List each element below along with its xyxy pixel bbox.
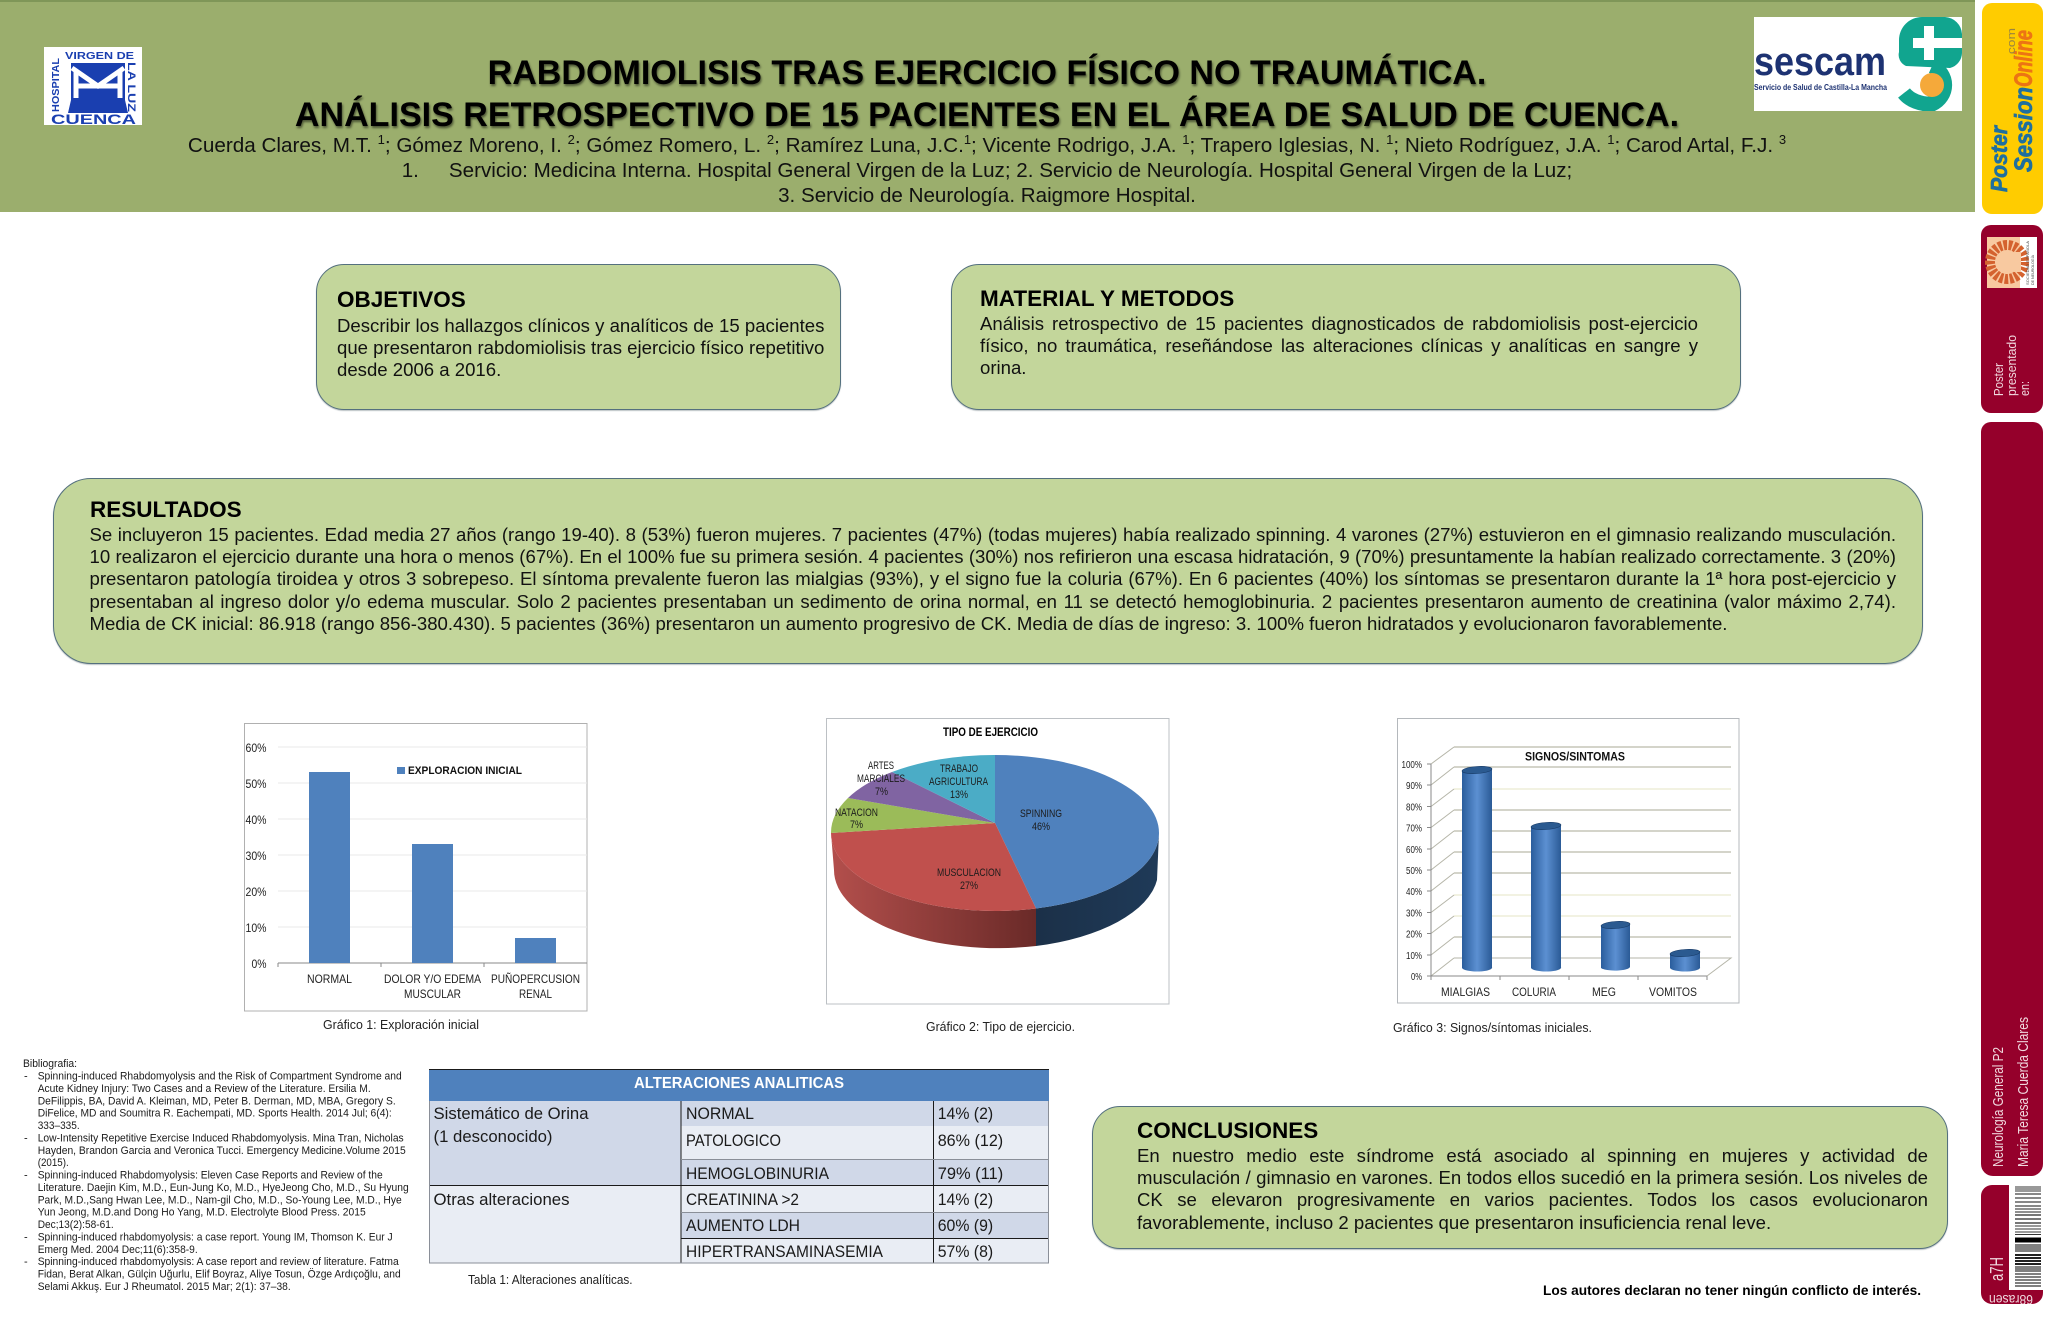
text: resultados: Media de CK inicial: 86.918 (rango 856-380.430). 5 pacientes (36%) presentaron un aumento progresivo de CK. Media de días de ingreso: 3. 100% fueron hidratados y evolucionaron favorablemente. — [90, 613, 1727, 634]
table text: NORMAL — [686, 1105, 754, 1123]
bars — [309, 772, 556, 963]
axis labels: 40% — [1406, 887, 1422, 898]
table text: 79% (11) — [938, 1165, 1003, 1183]
text block: bibliografia: Spinning-induced rhabdomyolysis: a case report. Young IM, Thomson K. Eur J — [38, 1231, 393, 1243]
axis labels: 100% — [1402, 760, 1422, 771]
axis labels: 0% — [1411, 972, 1422, 983]
table: alteraciones analiticas — [429, 1069, 1049, 1264]
heading: material y metodos: MATERIAL Y METODOS — [980, 286, 1234, 310]
header band — [0, 0, 1975, 212]
affiliations line 2: 3. Servicio de Neurología. Raigmore Hospital. — [778, 184, 1196, 207]
axis labels: VOMITOS — [1649, 985, 1697, 999]
axis labels: MIALGIAS — [1441, 985, 1490, 999]
text: material y metodos: orina. — [980, 357, 1026, 378]
pie labels: ARTES — [868, 760, 894, 772]
authors: Cuerda Clares, M.T. 1; Gómez Moreno, I. 2; Gómez Romero, L. 2; Ramírez Luna, J.C.1; Vicente Rodrigo, J.A. 1; Trapero Iglesias, N. 1; Nieto Rodríguez, J.A. 1; Carod Artal, F.J. 3 — [188, 132, 1786, 157]
axis labels: 70% — [1406, 824, 1422, 834]
affiliations line 1: 1. Servicio: Medicina Interna. Hospital General Virgen de la Luz; 2. Servicio de Neurología. Hospital General Virgen de la Luz; — [402, 159, 1572, 182]
bar chart: exploracion inicial — [244, 723, 588, 1012]
sidebar: barcode panel — [1981, 1185, 2043, 1304]
text: resultados: 10 realizaron el ejercicio durante una hora o menos (67%). En el 100% fue su primera sesión. 4 pacientes (30%) nos refirieron una escasa hidratación, 9 (70%) presuntamente la habían realizado correctamente. 3 (20%) — [90, 546, 1896, 567]
title — [188, 54, 1786, 207]
axis labels: RENAL — [519, 987, 552, 1001]
panel: conclusiones — [1092, 1106, 1948, 1249]
text: objetivos — [337, 314, 824, 380]
pie labels: 46% — [1032, 821, 1050, 833]
table body — [429, 1070, 1049, 1263]
logo: Hospital Virgen de la Luz: LA LUZ — [125, 62, 137, 112]
pie sides — [831, 833, 1159, 948]
text block: bibliografia: Emerg Med. 2004 Dec;11(6):358-9. — [38, 1244, 198, 1256]
3d bar chart: signos y sintomas — [1397, 718, 1740, 1004]
table text: AUMENTO LDH — [686, 1217, 800, 1235]
sidebar: session and presenter panel: Maria Teresa Cuerda Clares — [2015, 1017, 2032, 1167]
axis labels: 90% — [1406, 781, 1422, 792]
table text: 14% (2) — [938, 1191, 993, 1209]
text block: bibliografia: Yun Jeong, M.D.and Dong Ho Yang, M.D. Electrolyte Blood Press. 2015 — [38, 1207, 366, 1219]
text block: bibliografia: - — [24, 1170, 28, 1182]
sidebar: session and presenter panel: Neurología General P2 — [1990, 1047, 2007, 1167]
chart title: SIGNOS/SINTOMAS — [1525, 752, 1625, 764]
sidebar: session and presenter panel — [1981, 422, 2043, 1176]
pie labels: TRABAJO — [940, 763, 978, 775]
table text: (1 desconocido) — [434, 1128, 552, 1146]
logo: sescam — [1754, 17, 1962, 111]
icon: neurology society logo: SOCIEDAD ESPAÑOLA — [2025, 241, 2030, 285]
text block: bibliografia: Fidan, Berat Alkan, Gülçin Uğurlu, Elif Boyraz, Aliye Tosun, Özge Ardıçoğlu, and — [38, 1269, 401, 1281]
heading: conclusiones: CONCLUSIONES — [1137, 1118, 1318, 1143]
panel: objetivos — [316, 264, 841, 410]
text: resultados: presentaban al ingreso dolor y/o edema muscular. Solo 2 pacientes presentaban un sedimento de orina normal, en 11 se detectó hemoglobinuria. 2 pacientes presentaron aumento de creatinina (valor máximo 2,74). — [90, 591, 1896, 612]
text block: bibliografia: Spinning-induced Rhabdomyolysis: Eleven Case Reports and Review of the — [38, 1170, 383, 1182]
text: material y metodos — [980, 312, 1698, 378]
text block: bibliografia: - — [24, 1132, 28, 1144]
table text: HEMOGLOBINURIA — [686, 1165, 829, 1183]
text block: bibliografia: - — [24, 1256, 28, 1268]
text block: bibliografia: DeFilippis, BA, David A. Kleiman, MD, Peter B. Derman, MD, MBA, Gregory S. — [38, 1095, 396, 1107]
text: poster presentado en: Poster — [1992, 363, 2006, 396]
axis labels: 30% — [1406, 908, 1422, 920]
pie labels: 7% — [850, 819, 863, 831]
sidebar: PosterSessionOnline badge: Online — [2010, 30, 2038, 87]
axis labels: DOLOR Y/O EDEMA — [384, 972, 481, 986]
text: resultados — [90, 524, 1896, 634]
pie labels: SPINNING — [1020, 808, 1062, 820]
text: conclusiones — [1137, 1145, 1928, 1233]
sidebar: barcode panel: a7H — [1987, 1257, 2007, 1281]
table text: Sistemático de Orina — [434, 1105, 589, 1123]
text block: bibliografia: - — [24, 1070, 28, 1082]
heading: objetivos: OBJETIVOS — [337, 287, 466, 312]
text block: bibliografia: Bibliografia: — [23, 1058, 77, 1070]
sidebar: presented at panel — [1981, 225, 2043, 413]
text: resultados: presentaron patología tiroidea y otros 3 sobrepeso. El síntoma prevalente fueron las mialgias (93%), y el signo fue la coluria (67%). En 6 pacientes (40%) los síntomas se presentaron durante la 1ª hora post-ejercicio y — [90, 568, 1896, 589]
pie labels: 7% — [875, 786, 888, 798]
title line 1: RABDOMIOLISIS TRAS EJERCICIO FÍSICO NO TRAUMÁTICA. — [488, 54, 1486, 92]
pie chart: tipo de ejercicio — [826, 718, 1170, 1004]
pie labels: TIPO DE EJERCICIO — [943, 727, 1038, 739]
sidebar: PosterSessionOnline badge: Poster — [1986, 125, 2012, 192]
sidebar: PosterSessionOnline badge — [1982, 3, 2043, 214]
logo: Hospital Virgen de la Luz — [44, 47, 142, 125]
panel: material y metodos — [951, 264, 1741, 410]
axis labels: 40% — [246, 813, 267, 827]
axis labels: 20% — [1406, 930, 1422, 940]
axis labels: 50% — [1406, 866, 1422, 877]
axis labels: NORMAL — [307, 972, 352, 986]
axis labels: 30% — [246, 849, 267, 863]
logo: Hospital Virgen de la Luz: HOSPITAL — [51, 58, 62, 112]
logo: Hospital Virgen de la Luz: VIRGEN DE — [65, 51, 134, 62]
text: poster presentado en: en: — [2018, 381, 2032, 396]
text: poster presentado en — [1992, 335, 2032, 396]
icon: neurology society logo: DE NEUROLOGÍA — [2030, 255, 2035, 285]
text: poster presentado en: presentado — [2005, 335, 2019, 396]
text block: bibliografia: Acute Kidney Injury: Two Cases and a Review of the Literature. Ersilia M. — [38, 1083, 371, 1095]
text: conclusiones: musculación / gimnasio en varones. En todos ellos sucedió en la primera sesión. Los niveles de — [1137, 1167, 1928, 1188]
axis labels: 10% — [246, 921, 267, 935]
text: objetivos: que presentaron rabdomiolisis tras ejercicio físico repetitivo — [337, 337, 824, 358]
text block: bibliografia — [23, 1058, 409, 1293]
axis labels: 60% — [1406, 845, 1422, 856]
pie labels: 27% — [960, 880, 978, 892]
table text: PATOLOGICO — [686, 1132, 781, 1150]
axis labels: MUSCULAR — [404, 987, 461, 1001]
text: material y metodos: físico, no traumática, reseñándose las alteraciones clínicas y analíticas en sangre y — [980, 335, 1698, 356]
text block: bibliografia: - — [24, 1231, 28, 1243]
caption: grafico 1: Gráfico 1: Exploración inicial — [323, 1017, 479, 1032]
table text — [434, 1105, 1003, 1261]
table header: ALTERACIONES ANALITICAS — [634, 1075, 844, 1092]
table text: 14% (2) — [938, 1105, 993, 1123]
cylinders — [1462, 765, 1700, 972]
text: resultados: Se incluyeron 15 pacientes. Edad media 27 años (rango 19-40). 8 (53%) fueron mujeres. 7 pacientes (47%) (todas mujeres) había realizado spinning. 4 varones (27%) estuvieron en el gimnasio realizando musculación. — [90, 524, 1896, 545]
text: conclusiones: En nuestro medio este síndrome está asociado al spinning en mujeres y actividad de — [1137, 1145, 1928, 1166]
text: objetivos: Describir los hallazgos clínicos y analíticos de 15 pacientes — [337, 314, 824, 336]
sidebar: PosterSessionOnline badge: .com — [2006, 28, 2018, 58]
text block: bibliografia: Spinning-induced rhabdomyolysis: A case report and review of literature. Fatma — [38, 1256, 400, 1268]
axis labels: 50% — [246, 777, 267, 791]
barcode — [2015, 1187, 2041, 1286]
title line 2: ANÁLISIS RETROSPECTIVO DE 15 PACIENTES EN EL ÁREA DE SALUD DE CUENCA. — [295, 96, 1679, 134]
table text: CREATININA >2 — [686, 1191, 799, 1209]
text block: bibliografia: DiFelice, MD and Soumitra R. Eachempati, MD. Sports Health. 2014 Jul; 6(4): — [38, 1108, 392, 1120]
legend: EXPLORACION INICIAL — [408, 765, 522, 777]
axis labels: 10% — [1406, 951, 1422, 962]
pie labels: 13% — [950, 789, 968, 801]
axis labels: 80% — [1406, 802, 1422, 814]
logo: sescam: sescam — [1754, 40, 1886, 84]
heading: resultados: RESULTADOS — [90, 497, 242, 522]
pie labels: MARCIALES — [857, 773, 905, 785]
axis labels: 60% — [246, 741, 267, 755]
axis labels — [1402, 760, 1697, 999]
axis labels: COLURIA — [1512, 985, 1556, 999]
text: conclusiones: CK se elevaron progresivamente en varios pacientes. Todos los casos evolucionaron — [1137, 1189, 1928, 1210]
icon: neurology society logo — [1987, 237, 2037, 288]
pie labels: AGRICULTURA — [929, 776, 988, 788]
pie slices — [831, 755, 1159, 911]
axis labels: 20% — [246, 885, 267, 899]
text block: bibliografia: Dec;13(2):58-61. — [38, 1219, 114, 1231]
axis labels: MEG — [1592, 985, 1616, 999]
table text: 60% (9) — [938, 1217, 993, 1235]
text: material y metodos: Análisis retrospectivo de 15 pacientes diagnosticados de rabdomiolisis post-ejercicio — [980, 312, 1698, 334]
table text: 57% (8) — [938, 1243, 993, 1261]
table text: HIPERTRANSAMINASEMIA — [686, 1243, 883, 1261]
table text: 86% (12) — [938, 1132, 1003, 1150]
text: objetivos: desde 2006 a 2016. — [337, 359, 501, 380]
axis labels: 0% — [252, 957, 267, 971]
text block: bibliografia: (2015). — [38, 1157, 69, 1169]
pie labels: NATACION — [835, 807, 878, 819]
text: conclusiones: favorablemente, incluso 2 pacientes que presentaron insuficiencia renal leve. — [1137, 1212, 1771, 1233]
table header — [429, 1069, 1049, 1101]
logo: sescam: Servicio de Salud de Castilla-La Mancha — [1754, 82, 1887, 92]
panel: resultados — [53, 478, 1923, 664]
sidebar: PosterSessionOnline badge: Session — [2010, 87, 2038, 172]
pie labels — [835, 727, 1062, 892]
text: conflicto de interes: Los autores declaran no tener ningún conflicto de interés. — [1543, 1283, 1921, 1298]
axis labels — [246, 741, 580, 1001]
table text: Otras alteraciones — [434, 1191, 570, 1209]
text block: bibliografia: Selami Akkuş. Eur J Rheumatol. 2015 Mar; 2(1): 37–38. — [38, 1281, 291, 1293]
pie labels: MUSCULACION — [937, 867, 1001, 879]
text block: bibliografia: 333–335. — [38, 1120, 80, 1132]
